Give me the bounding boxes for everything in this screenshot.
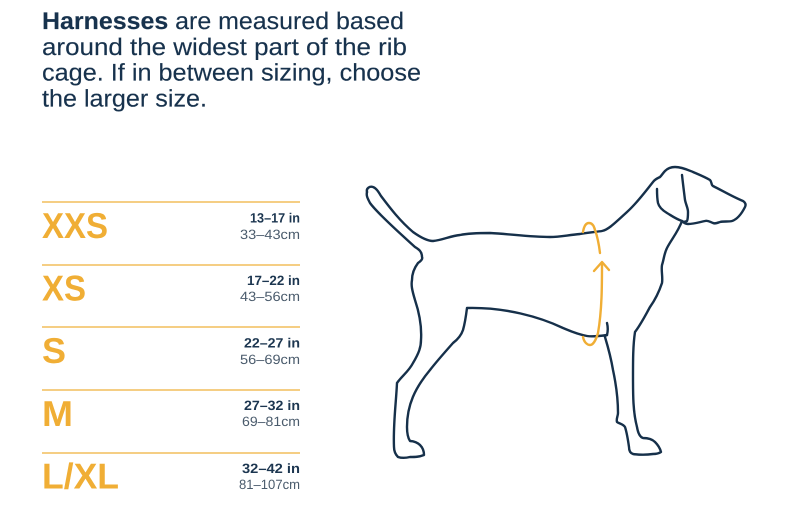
- size row: M: M: [42, 393, 73, 434]
- size row: XXS: [42, 202, 300, 246]
- arrow head: [594, 262, 609, 271]
- measurement loop and arrow: [583, 223, 609, 345]
- heading text: the larger size.: [42, 86, 207, 112]
- heading text: around the widest part of the rib: [42, 34, 407, 61]
- size row: M: [42, 390, 300, 434]
- loop top: [583, 223, 600, 253]
- dog body silhouette: [367, 167, 746, 455]
- heading text: cage. If in between sizing, choose: [42, 60, 421, 86]
- size row: M: 27–32 in: [244, 398, 300, 413]
- size row: M: 69–81cm: [242, 414, 300, 429]
- heading text: Harnesses are measured based: [42, 8, 404, 35]
- dog ear: [657, 175, 688, 222]
- size table: [42, 202, 300, 496]
- size row: L/XL: 32–42 in: [242, 461, 300, 476]
- size row: S: S: [42, 330, 66, 371]
- size row: XXS: 13–17 in: [250, 210, 300, 226]
- dog outline illustration: [367, 167, 746, 458]
- size row: XS: [42, 265, 300, 308]
- size row: XS: 43–56cm: [240, 289, 300, 304]
- size row: XXS: 33–43cm: [240, 227, 300, 242]
- size row: S: 56–69cm: [240, 352, 300, 367]
- size row: XXS: XXS: [42, 205, 108, 246]
- heading text: [42, 8, 421, 112]
- size row: L/XL: L/XL: [42, 456, 119, 496]
- size row: S: 22–27 in: [244, 336, 300, 350]
- size row: XS: XS: [42, 268, 86, 308]
- size row: XS: 17–22 in: [247, 273, 300, 288]
- size row: L/XL: 81–107cm: [239, 477, 300, 492]
- size row: L/XL: [42, 453, 300, 496]
- dog belly and hind leg: [367, 192, 607, 458]
- arrow shaft and loop bottom: [583, 263, 602, 345]
- size row: S: [42, 327, 300, 371]
